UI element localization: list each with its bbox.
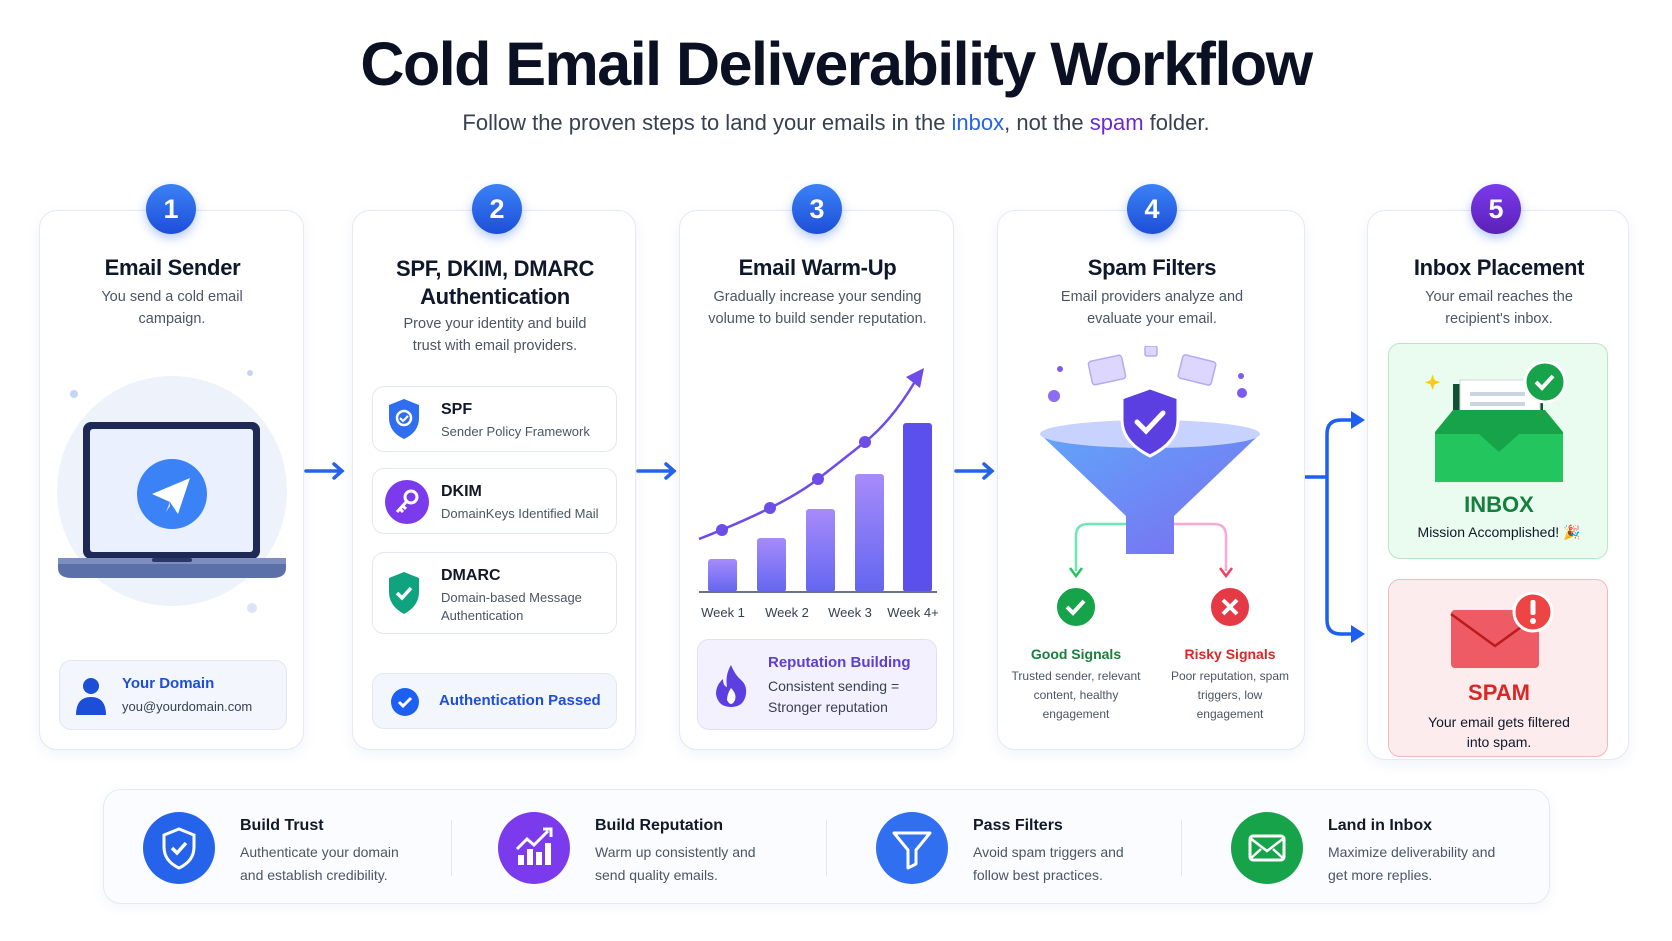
arrow 1 [304,462,345,480]
domain box: you@yourdomain.com [122,699,252,714]
bar chart: Week 1 [701,605,745,620]
heading: Email Warm-Up [739,255,896,280]
domain box [59,660,287,730]
DKIM box: DKIM [441,483,482,500]
description: You send a cold email campaign. [101,289,243,327]
good signals [1012,588,1140,721]
step number 4: 4 [1144,194,1160,224]
inbox result [1388,343,1608,559]
title: Cold Email Deliverability Workflow [360,30,1312,98]
item: pass filters [876,812,1124,884]
risky signals [1171,588,1289,721]
item: build trust: Authenticate your domain [240,844,399,860]
good signals: content, healthy [1034,688,1118,702]
panel: authentication [352,210,636,750]
step number 1: 1 [163,194,179,224]
heading: Email Sender [105,255,240,280]
inbox result: Mission Accomplished! 🎉 [1418,524,1580,540]
step number 4 [1127,184,1177,234]
spam result [1388,579,1608,757]
authentication passed: Authentication Passed [439,692,601,709]
item: pass filters: Avoid spam triggers and [973,844,1124,860]
panel: spam filters [997,210,1305,750]
bar chart: Week 4+ [887,605,939,620]
step number 3 [792,184,842,234]
icon: user [76,678,106,715]
description: Email providers analyze and evaluate your email. [1061,289,1243,327]
reputation box: Reputation Building [768,654,910,671]
DMARC box [372,552,617,634]
DKIM box [372,468,617,534]
bar chart: Week 2 [765,605,809,620]
authentication passed [372,673,617,729]
panel: inbox placement [1367,210,1629,760]
step number 5: 5 [1488,194,1504,224]
DMARC box: Authentication [441,608,523,623]
step number 2: 2 [489,194,505,224]
heading: Authentication [420,284,570,309]
heading: Spam Filters [1088,255,1216,280]
risky signals: Poor reputation, spam [1171,669,1289,683]
subtitle: Follow the proven steps to land your emails in the inbox, not the spam folder. [462,110,1210,135]
good signals: Trusted sender, relevant [1012,669,1140,683]
panel: summary bar [103,789,1550,904]
item: build reputation: send quality emails. [595,867,718,883]
SPF box: Sender Policy Framework [441,424,590,439]
step number 3: 3 [809,194,825,224]
spam result: into spam. [1467,734,1531,750]
description: Prove your identity and build trust with email providers. [404,316,586,354]
risky signals: Risky Signals [1184,646,1276,662]
item: land in inbox: Land in Inbox [1328,817,1432,834]
item: land in inbox [1231,812,1495,884]
heading: SPF, DKIM, DMARC [396,256,594,281]
inbox result: INBOX [1464,492,1534,517]
arrow 2 [636,462,677,480]
heading: Inbox Placement [1414,255,1584,280]
illustration: laptop [57,370,287,613]
panel: warm-up [679,210,954,750]
bar chart [698,368,939,620]
spam result: SPAM [1468,680,1530,705]
DMARC box: Domain-based Message [441,590,582,605]
heading [396,256,594,309]
panel: email sender [39,210,304,750]
illustration: funnel [1040,346,1260,578]
item: land in inbox: get more replies. [1328,867,1432,883]
reputation box: Consistent sending = [768,678,899,694]
good signals: engagement [1043,707,1109,721]
bar chart: Week 3 [828,605,872,620]
item: pass filters: Pass Filters [973,817,1063,834]
item: pass filters: follow best practices. [973,867,1103,883]
description: Gradually increase your sending volume to build sender reputation. [708,289,927,327]
risky signals: triggers, low [1198,688,1262,702]
reputation box: Stronger reputation [768,699,888,715]
item: build reputation: Build Reputation [595,817,723,834]
item: land in inbox: Maximize deliverability and [1328,844,1495,860]
arrow 3 [954,462,995,480]
item: build reputation: Warm up consistently and [595,844,756,860]
item: build trust: and establish credibility. [240,867,388,883]
step number 1 [146,184,196,234]
DMARC box: DMARC [441,567,501,584]
domain box: Your Domain [122,675,214,692]
spam result: Your email gets filtered [1428,714,1570,730]
icon: flame [716,665,746,707]
item: build trust: Build Trust [240,817,324,834]
item: build reputation [498,812,756,884]
step number 2 [472,184,522,234]
good signals: Good Signals [1031,646,1121,662]
DKIM box: DomainKeys Identified Mail [441,506,599,521]
risky signals: engagement [1197,707,1263,721]
SPF box: SPF [441,401,472,418]
step number 5 [1471,184,1521,234]
item: build trust [143,812,399,884]
SPF box [372,386,617,452]
reputation box [697,639,937,730]
arrow: branch [1305,411,1365,643]
description: Your email reaches the recipient's inbox. [1425,289,1573,327]
